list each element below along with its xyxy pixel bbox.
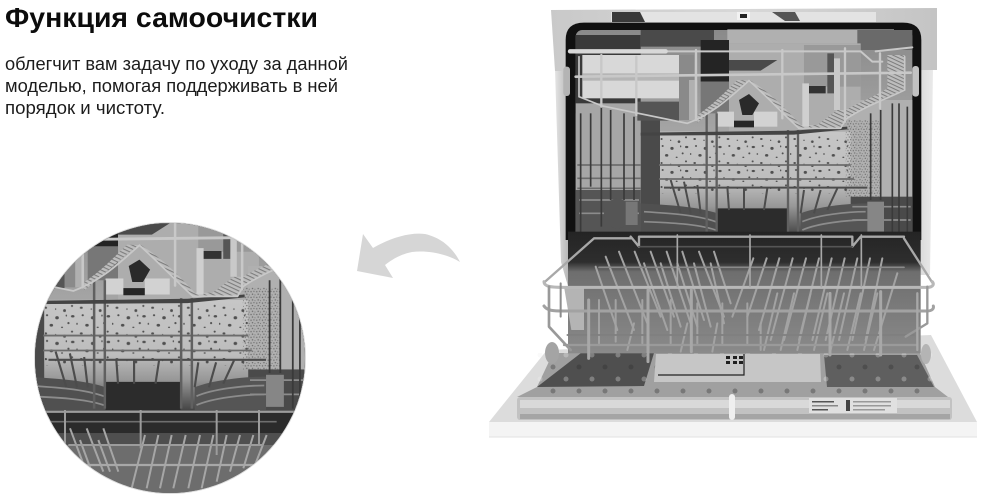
stainless body frame [551, 8, 937, 300]
dishwasher [489, 8, 977, 437]
interior [563, 23, 921, 240]
door latch [729, 394, 735, 420]
description text: облегчит вам задачу по уходу за данной [5, 53, 348, 74]
lower basket [544, 232, 933, 362]
arrow [357, 234, 460, 278]
description text [5, 53, 348, 118]
description text: порядок и чистоту. [5, 97, 165, 118]
wheels [545, 342, 931, 364]
magnified circle detail [34, 222, 306, 494]
magnified lower rack [35, 410, 305, 493]
rating label [809, 398, 897, 413]
door [489, 335, 977, 437]
detergent box [654, 354, 821, 382]
title: Функция самоочистки [5, 2, 318, 33]
description text: моделью, помогая поддерживать в ней [5, 75, 338, 96]
